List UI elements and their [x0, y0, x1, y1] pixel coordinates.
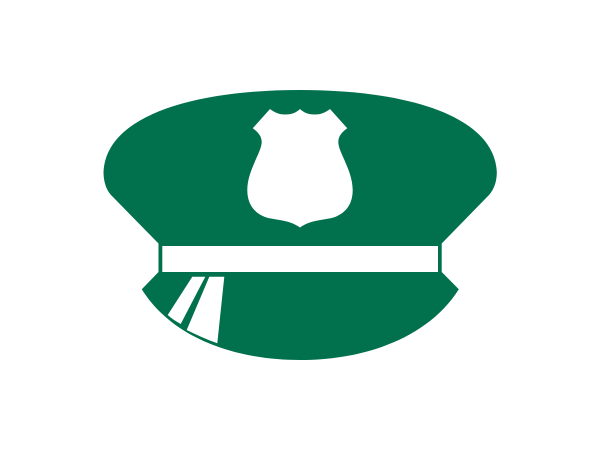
cap band [158, 243, 442, 272]
visor road stripe left [168, 277, 205, 324]
badge shield [247, 109, 353, 228]
cap crown [104, 90, 497, 244]
cap visor [142, 272, 459, 360]
visor road stripe right [187, 277, 224, 343]
